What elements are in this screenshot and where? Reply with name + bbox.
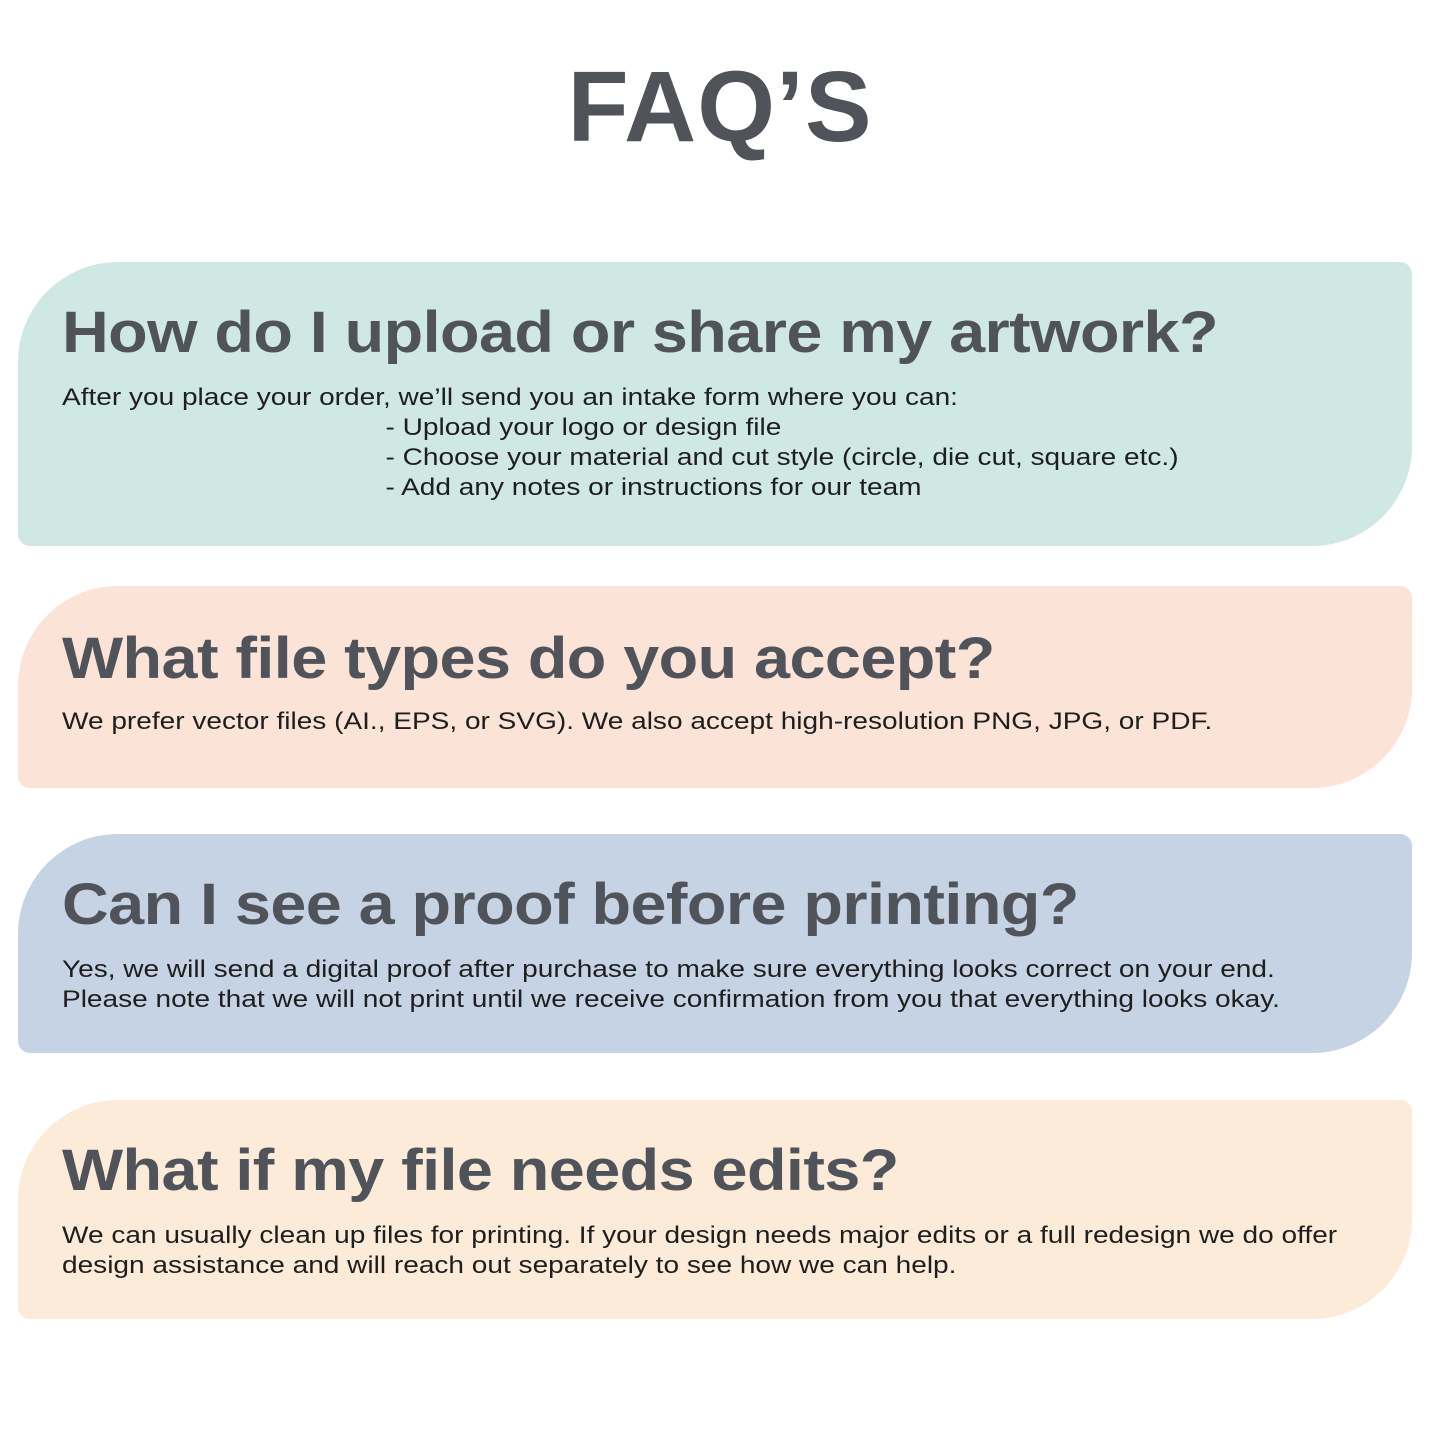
text block: proof answer: Please note that we will not print until we receive confirmation from you that everything looks okay.	[62, 986, 1280, 1013]
text block: edits answer: design assistance and will reach out separately to see how we can help.	[62, 1252, 956, 1279]
heading: edits: What if my file needs edits?	[62, 1138, 899, 1203]
title: FAQ’S	[567, 51, 873, 163]
text block: proof answer	[62, 956, 1280, 1013]
panel: edits	[18, 1100, 1412, 1319]
panel: proof	[18, 834, 1412, 1053]
text block: file types answer: We prefer vector files (AI., EPS, or SVG). We also accept high-resolution PNG, JPG, or PDF.	[62, 708, 1212, 735]
text block: upload answer: - Choose your material and cut style (circle, die cut, square etc.)	[386, 444, 1179, 471]
panel: file types	[18, 586, 1412, 788]
text block: upload answer: - Upload your logo or design file	[386, 414, 781, 441]
text block: edits answer: We can usually clean up files for printing. If your design needs major edits or a full redesign we do offer	[62, 1222, 1337, 1249]
heading: upload: How do I upload or share my artwork?	[62, 300, 1218, 365]
text block: upload answer: After you place your order, we’ll send you an intake form where you can:	[62, 384, 958, 411]
panel: upload artwork	[18, 262, 1412, 546]
text block: proof answer: Yes, we will send a digital proof after purchase to make sure everything looks correct on your end.	[62, 956, 1275, 983]
text block: upload answer	[62, 384, 1179, 501]
heading: proof: Can I see a proof before printing?	[62, 872, 1079, 937]
text block: upload answer: - Add any notes or instructions for our team	[386, 474, 922, 501]
text block: edits answer	[62, 1222, 1337, 1279]
heading: file types: What file types do you accept?	[62, 626, 995, 691]
